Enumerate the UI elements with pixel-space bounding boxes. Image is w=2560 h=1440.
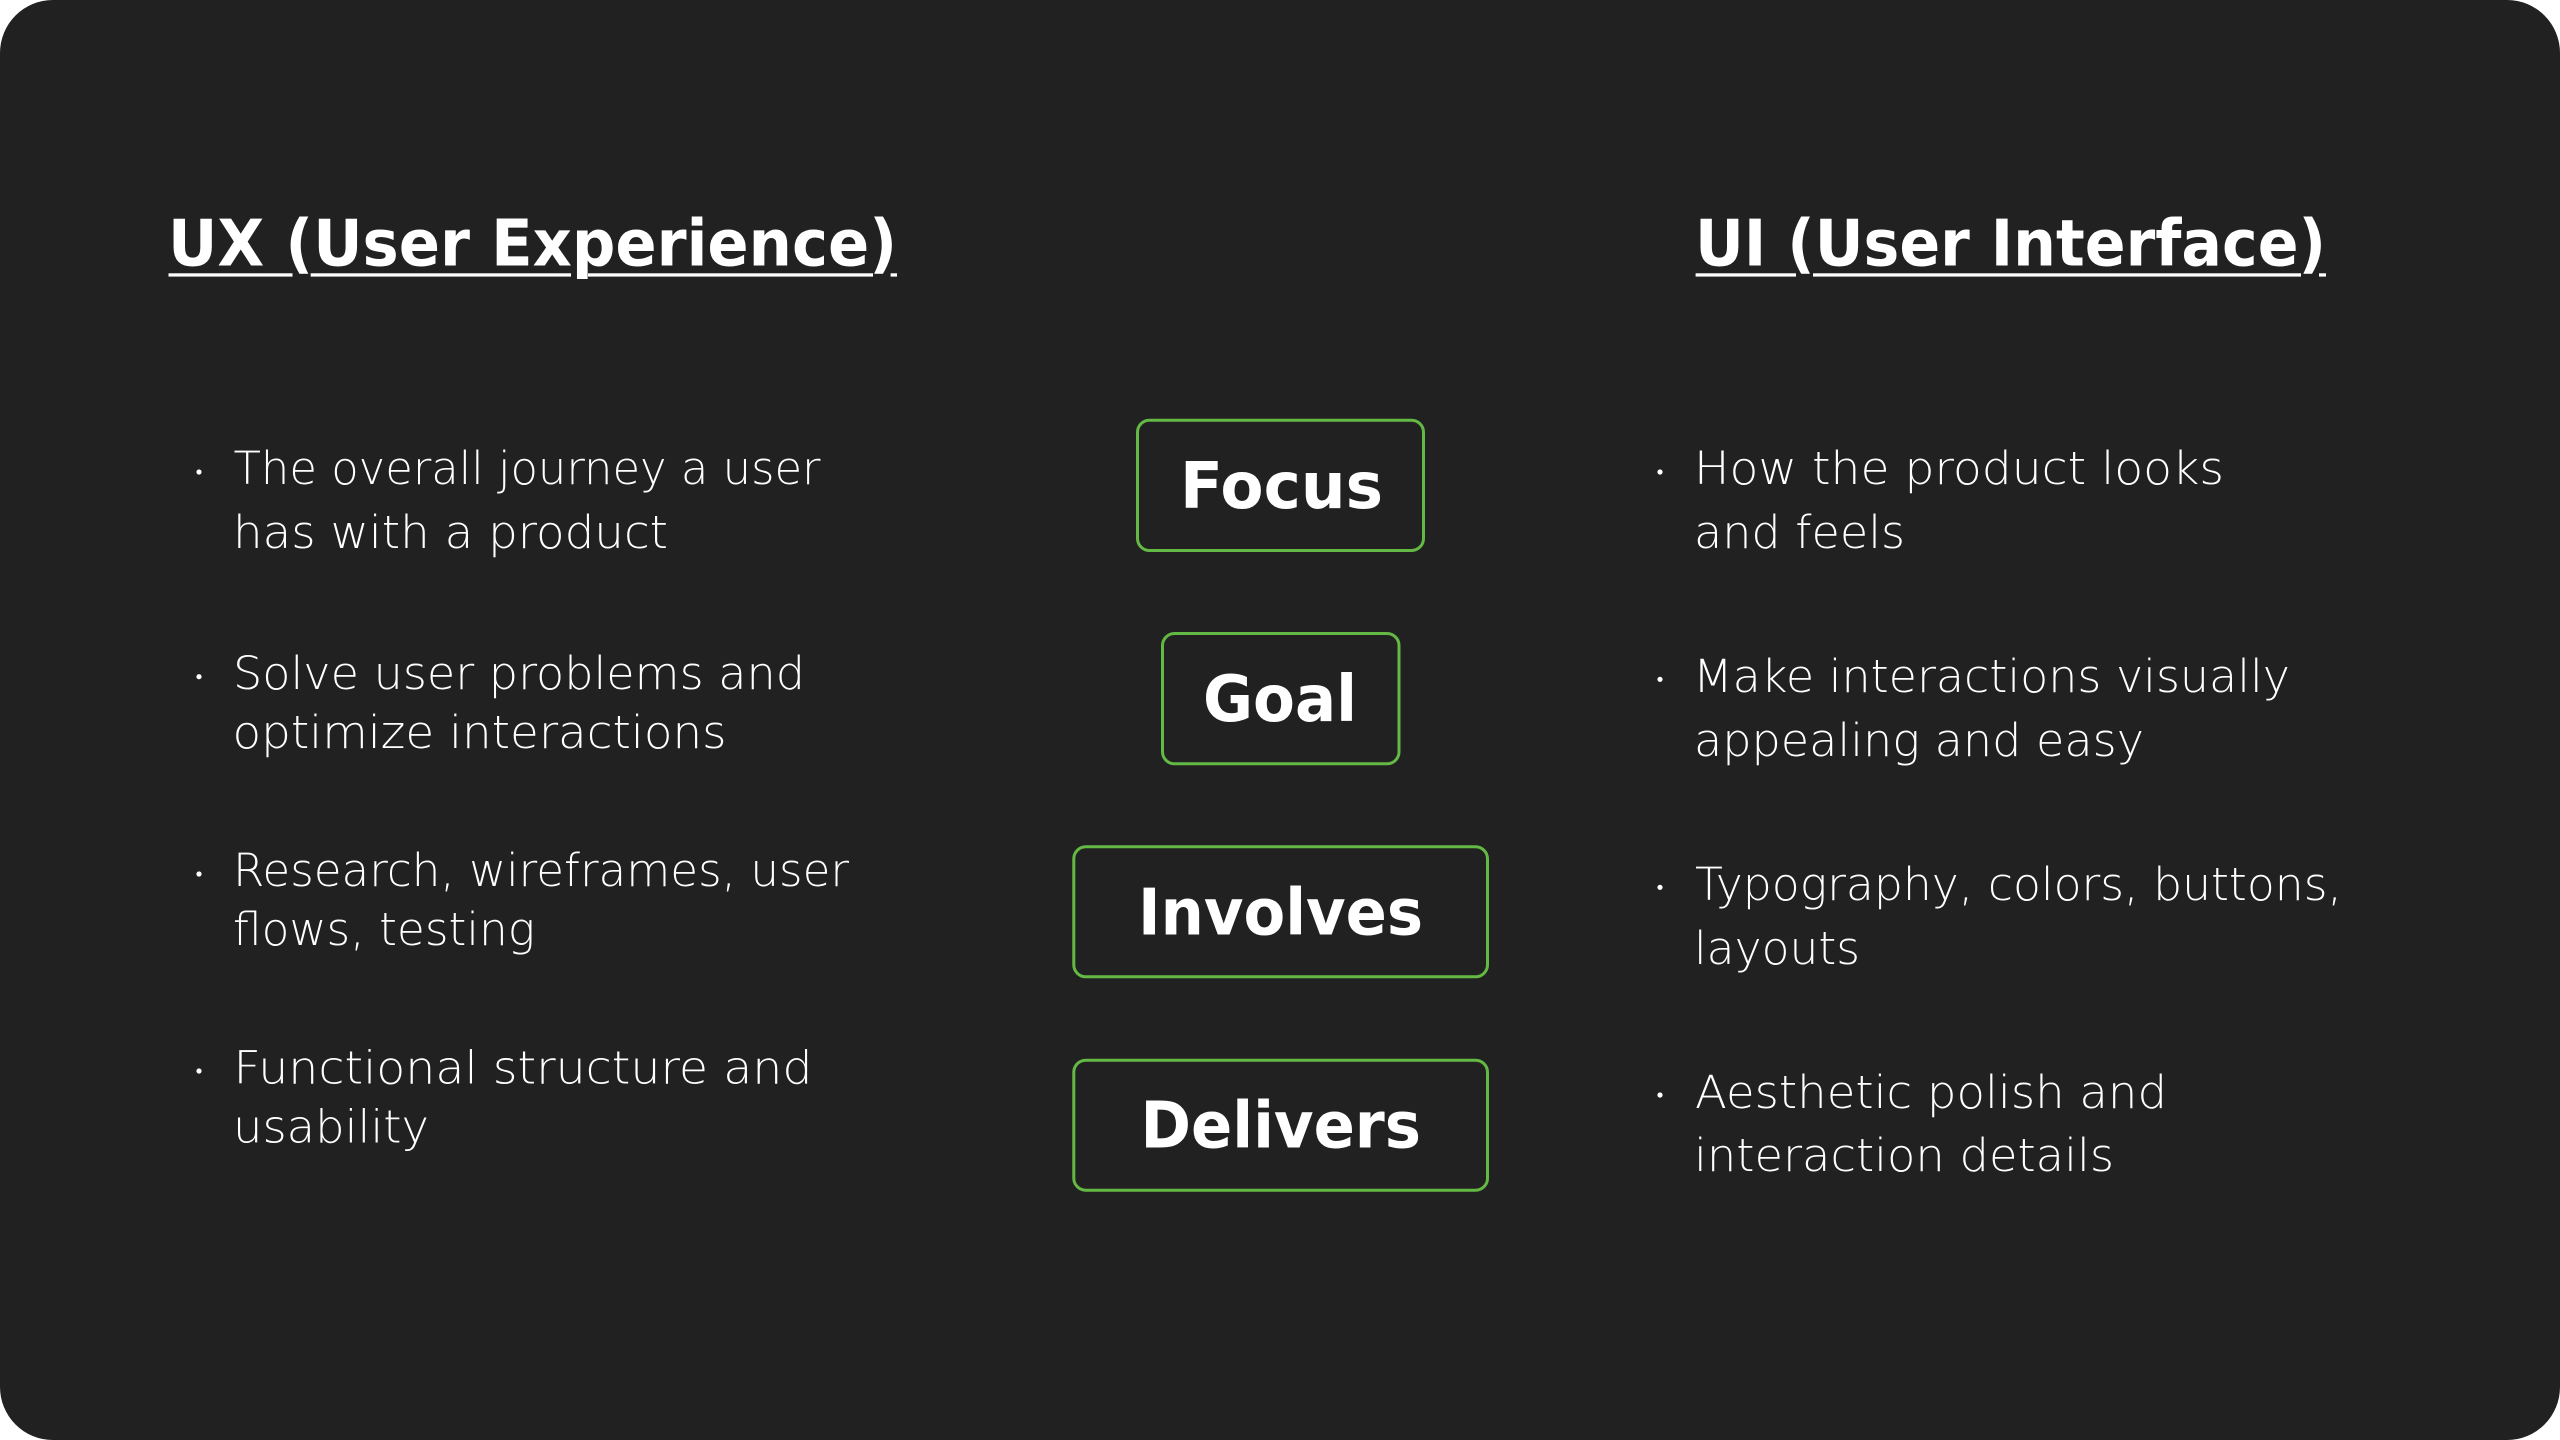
UX bullet 2: Solve user problems and	[233, 647, 805, 700]
label box: Goal	[1162, 634, 1399, 764]
UI bullet 1	[1657, 442, 2224, 559]
UI bullet 4	[1657, 1066, 2167, 1182]
UI list	[1657, 442, 2342, 1182]
UI bullet 2: Make interactions visually	[1693, 650, 2290, 703]
UX bullet 3	[196, 844, 849, 956]
UX bullet 4: Functional structure and	[234, 1042, 812, 1094]
heading: UI (User Interface): UI (User Interface)	[1695, 208, 2326, 282]
UI bullet 2	[1657, 650, 2290, 767]
label box: Goal: Goal	[1203, 663, 1357, 737]
UX list	[196, 442, 849, 1154]
UX bullet 4: usability	[233, 1100, 429, 1154]
label box: Focus	[1138, 420, 1424, 550]
UX bullet 2	[196, 647, 805, 759]
UI bullet 4: interaction details	[1694, 1129, 2114, 1182]
UI bullet 2: appealing and easy	[1694, 714, 2144, 767]
UI bullet 3: layouts	[1694, 922, 1860, 975]
UX bullet 1: The overall journey a user	[234, 442, 821, 495]
center labels	[1074, 420, 1488, 1190]
UI bullet 4: Aesthetic polish and	[1695, 1066, 2167, 1119]
label box: Involves: Involves	[1138, 876, 1423, 950]
UX bullet 2: optimize interactions	[232, 706, 726, 759]
heading: UX (User Experience): UX (User Experience)	[168, 208, 897, 282]
label box: Involves	[1074, 847, 1488, 977]
UX bullet 3: Research, wireframes, user	[233, 844, 849, 897]
UX bullet 1: has with a product	[233, 506, 668, 559]
UI bullet 1: and feels	[1694, 506, 1905, 559]
label box: Delivers	[1074, 1060, 1488, 1190]
label box: Delivers: Delivers	[1140, 1090, 1421, 1164]
UI bullet 1: How the product looks	[1694, 442, 2224, 495]
UI bullet 3: Typography, colors, buttons,	[1695, 858, 2342, 911]
UI bullet 3	[1657, 858, 2342, 975]
UX bullet 1	[196, 442, 821, 559]
UX bullet 4	[196, 1042, 812, 1154]
UX bullet 3: flows, testing	[233, 903, 535, 956]
label box: Focus: Focus	[1180, 450, 1383, 524]
